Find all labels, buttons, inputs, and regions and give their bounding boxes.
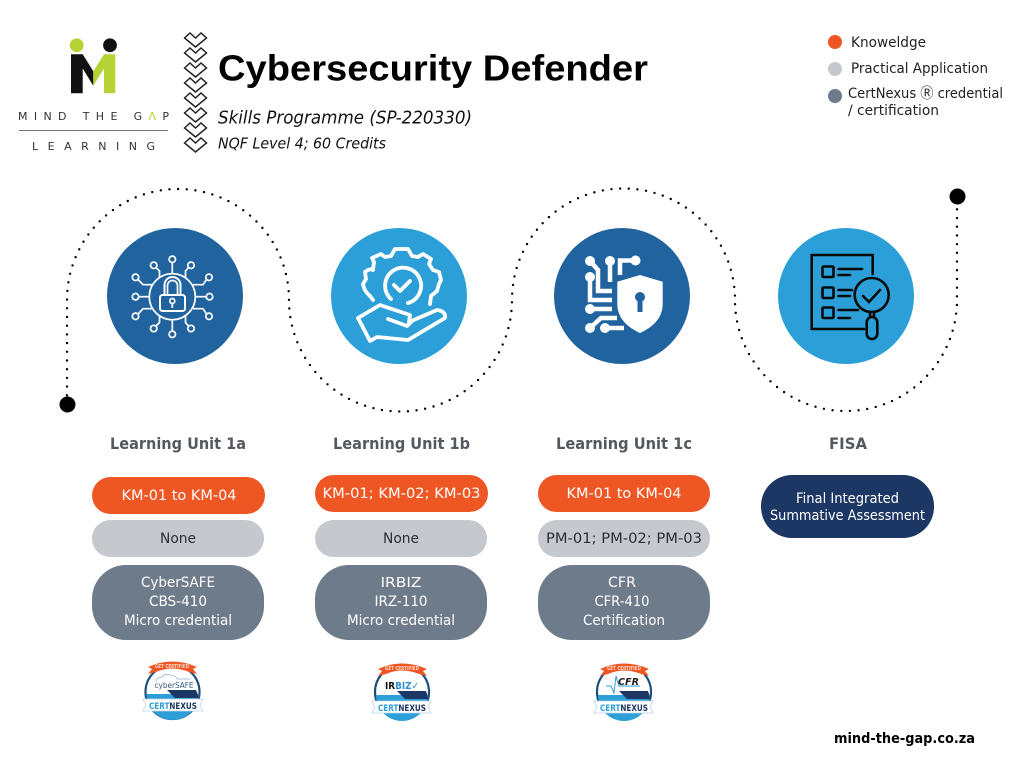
pill: credential 1c: Certification <box>583 613 665 629</box>
pill: knowledge 1b <box>315 475 488 512</box>
pill: credential 1a: CBS-410 <box>149 594 207 610</box>
legend item: credential: CertNexus Ⓡ credential <box>848 86 1003 102</box>
subtitle: level and credits: NQF Level 4; 60 Credits <box>218 134 386 152</box>
badge: IRBIZ: IRBIZ✓ <box>385 681 419 692</box>
badge: CyberSAFE: CERTNEXUS <box>149 702 197 712</box>
legend item: knowledge: Knoweldge <box>851 35 926 51</box>
pill: credential 1b: Micro credential <box>347 613 455 629</box>
dotted journey path <box>60 188 966 412</box>
pill: credential 1c: CFR-410 <box>594 594 650 610</box>
pill: knowledge 1a <box>92 477 265 514</box>
pill: FISA: Summative Assessment <box>770 508 925 524</box>
pill: credential 1a: Micro credential <box>124 613 232 629</box>
icon: checklist and magnifier <box>778 228 914 364</box>
badge: CFR <box>594 664 653 721</box>
logo: Mind the Gap Learning: LEARNING <box>32 140 155 153</box>
pill: knowledge 1a: KM-01 to KM-04 <box>122 488 237 504</box>
pill: credential 1b: IRBIZ <box>380 575 422 591</box>
legend item: credential: / certification <box>848 103 939 119</box>
logo: Mind the Gap Learning <box>18 38 169 153</box>
legend item: credential <box>828 86 1003 119</box>
pill: credential 1b <box>315 565 487 640</box>
pill: credential 1a <box>92 565 264 640</box>
pill: practical 1b: None <box>383 531 419 547</box>
subtitle: programme: Skills Programme (SP-220330) <box>218 108 472 128</box>
icon: gear and hand <box>331 228 467 364</box>
heading: Learning Unit 1c: Learning Unit 1c <box>556 434 692 453</box>
pill: practical 1b <box>315 520 487 557</box>
pill: practical 1c <box>538 520 710 557</box>
icon: circuit shield <box>554 228 690 364</box>
pill: credential 1c <box>538 565 710 640</box>
heading: Learning Unit 1a: Learning Unit 1a <box>110 434 246 453</box>
badge: CFR: CERTNEXUS <box>600 704 648 714</box>
pill: knowledge 1b: KM-01; KM-02; KM-03 <box>322 486 480 502</box>
heading: Learning Unit 1b: Learning Unit 1b <box>333 434 470 453</box>
heading: FISA: FISA <box>829 434 868 453</box>
pill: credential 1b: IRZ-110 <box>374 594 428 610</box>
pill: practical 1a: None <box>160 531 196 547</box>
icon: network lock <box>107 228 243 364</box>
pills: unit 1a <box>92 477 265 640</box>
legend item: practical application: Practical Application <box>851 61 988 77</box>
badge: CyberSAFE: cyberSAFE <box>154 681 194 690</box>
badge: IRBIZ: CERTNEXUS <box>378 704 426 714</box>
logo: Mind the Gap Learning: MIND THE G Λ P <box>18 110 169 123</box>
pill: FISA: Final Integrated <box>796 491 899 507</box>
legend <box>828 35 1003 119</box>
badge: IRBIZ: GET CERTIFIED <box>385 666 419 672</box>
icon: chevron column <box>184 33 206 152</box>
pill: practical 1a <box>92 520 264 557</box>
pills: unit 1b <box>315 475 488 640</box>
title: Cybersecurity Defender <box>218 48 648 88</box>
pill: knowledge 1c: KM-01 to KM-04 <box>566 486 682 502</box>
pills: unit 1c <box>538 475 710 640</box>
pill: FISA <box>761 475 934 538</box>
badge: IRBIZ <box>372 664 431 721</box>
badge: CyberSAFE: GET CERTIFIED <box>155 664 189 670</box>
badge: CFR: CFR <box>618 677 639 688</box>
pill: practical 1c: PM-01; PM-02; PM-03 <box>546 531 702 547</box>
badge: CyberSAFE <box>143 662 203 720</box>
pill: credential 1c: CFR <box>608 575 636 591</box>
badge: CFR: GET CERTIFIED <box>607 666 641 672</box>
pill: credential 1a: CyberSAFE <box>141 575 215 591</box>
pill: knowledge 1c <box>538 475 710 512</box>
footer website: mind-the-gap.co.za <box>834 731 975 747</box>
